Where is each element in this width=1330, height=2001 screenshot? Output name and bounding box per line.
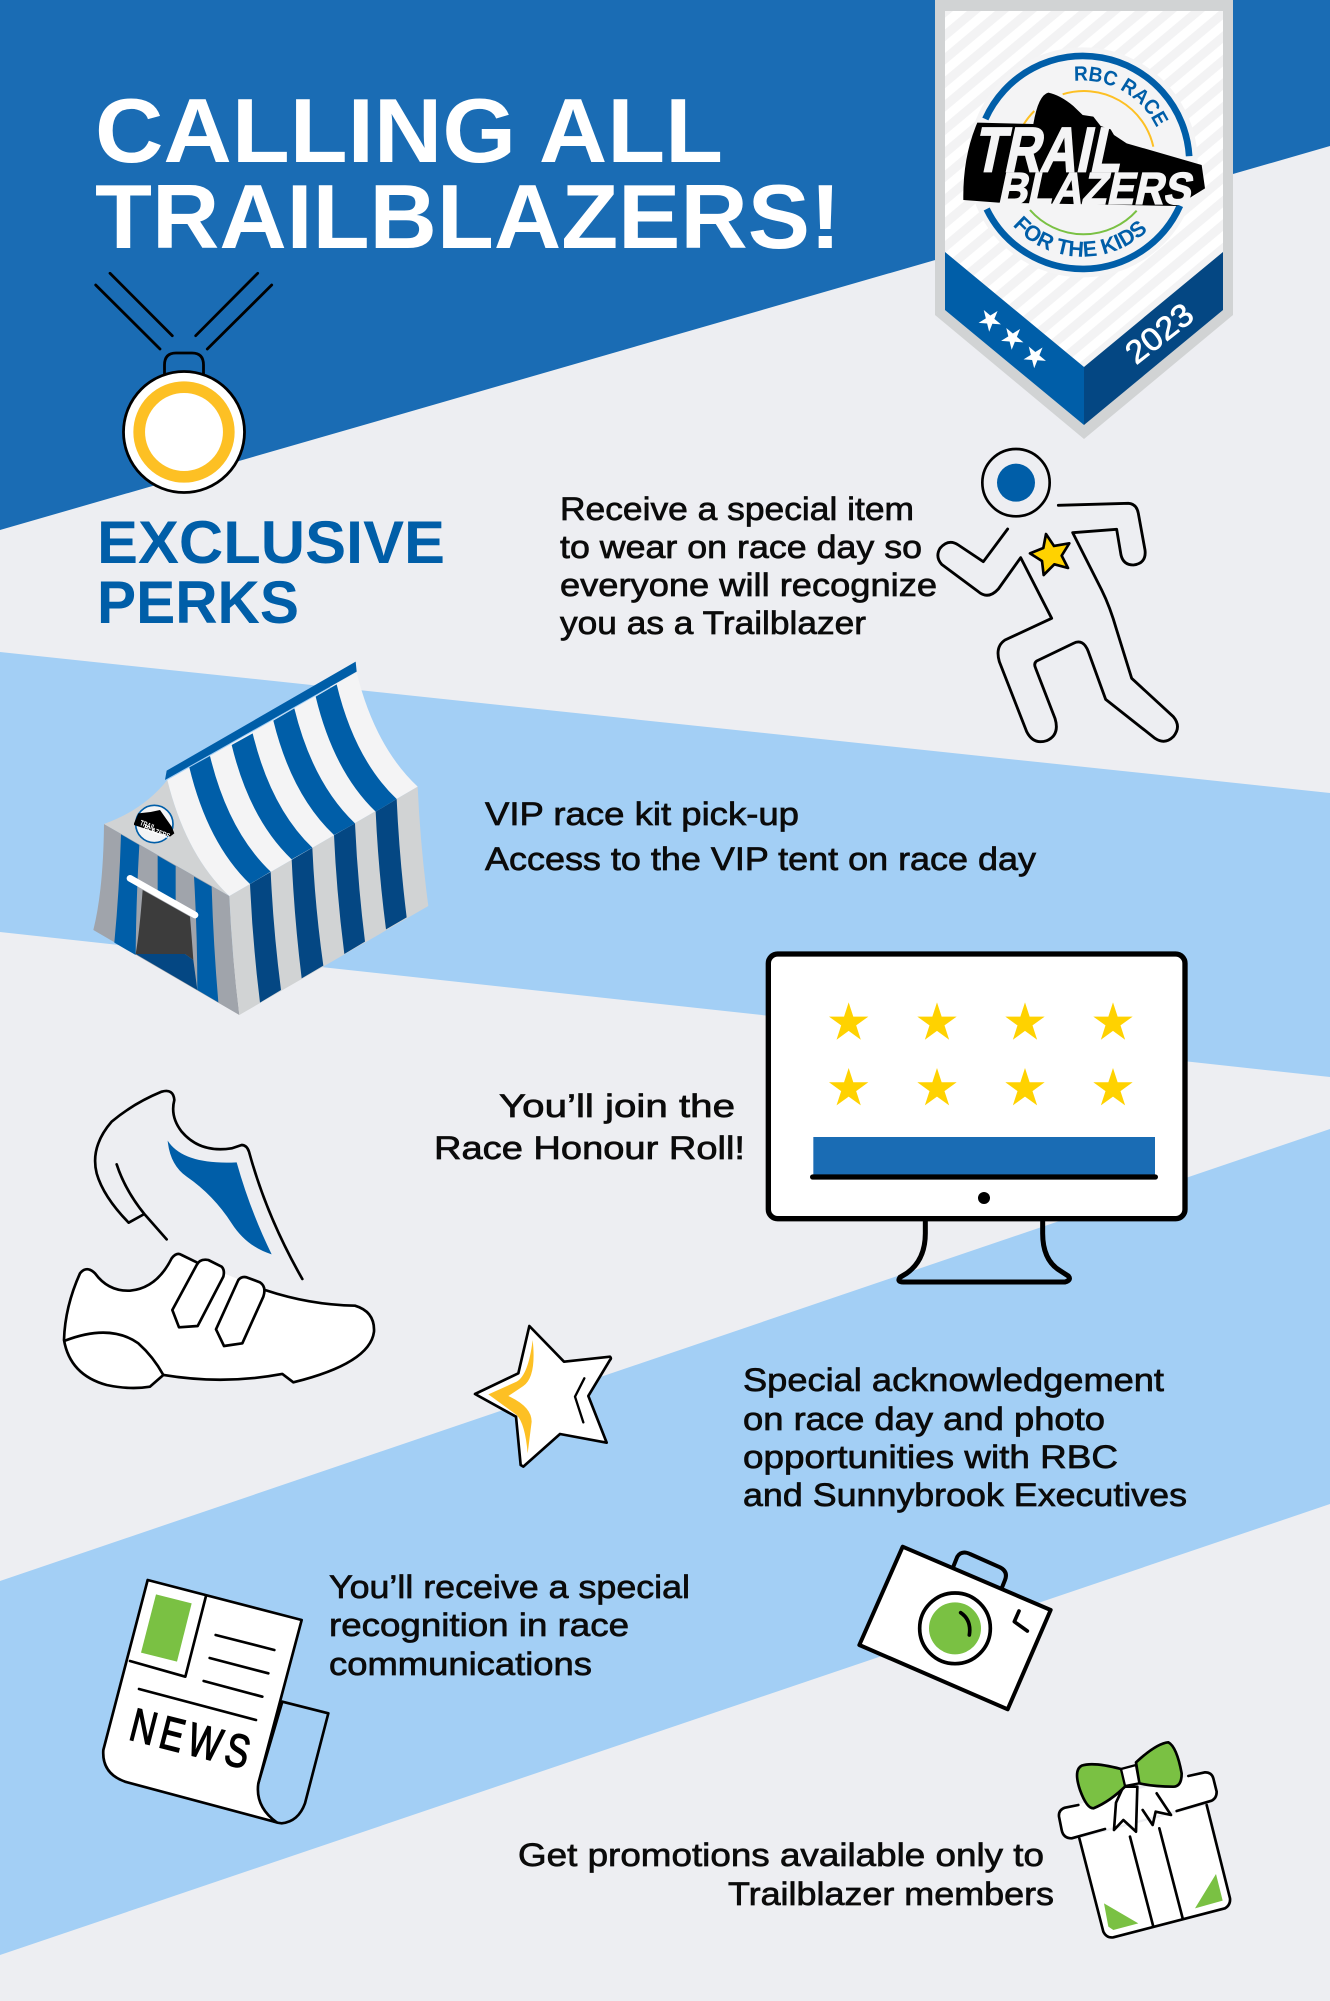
tent front wall xyxy=(93,824,239,1015)
icon: monitor with stars xyxy=(768,954,1185,1282)
race logo: BLAZERS xyxy=(995,163,1199,214)
icon: running shoe xyxy=(64,1091,374,1388)
text: acknowledgement: Special acknowledgement xyxy=(743,1362,1164,1398)
text: promotions xyxy=(518,1837,1054,1912)
text: special item: you as a Trailblazer xyxy=(560,605,866,641)
tent gable logo: BLAZERS xyxy=(143,823,171,841)
heading: exclusive perks: PERKS xyxy=(97,569,299,636)
badge: Trailblazers 2023 xyxy=(935,0,1233,439)
text: promotions: Get promotions available only to xyxy=(518,1837,1044,1873)
badge right ribbon xyxy=(1084,252,1223,425)
tent doorway xyxy=(136,890,193,960)
text: promotions: Trailblazer members xyxy=(728,1876,1054,1912)
badge stars xyxy=(975,304,1051,371)
tent ridge xyxy=(165,662,357,780)
text: VIP perks xyxy=(485,796,1036,877)
text: special item xyxy=(560,491,937,641)
text: honour roll: You’ll join the xyxy=(499,1088,735,1124)
text: recognition: recognition in race xyxy=(329,1607,629,1643)
badge year: 2023 xyxy=(1118,296,1200,371)
icon: VIP tent xyxy=(93,662,428,1015)
badge frame xyxy=(935,0,1233,439)
heading: exclusive perks: EXCLUSIVE xyxy=(97,509,445,576)
text: VIP perks: VIP race kit pick-up xyxy=(485,796,799,832)
text: acknowledgement: opportunities with RBC xyxy=(743,1439,1118,1475)
text: acknowledgement: on race day and photo xyxy=(743,1401,1105,1437)
star grid xyxy=(829,1002,1133,1105)
text: VIP perks: Access to the VIP tent on race day xyxy=(485,841,1036,877)
text: recognition: communications xyxy=(329,1646,592,1682)
race logo: TRAIL xyxy=(970,114,1132,186)
heading: exclusive perks xyxy=(97,509,445,636)
light blue band: lower xyxy=(0,1129,1330,1955)
dark blue header wedge xyxy=(0,0,1330,530)
race logo xyxy=(963,48,1205,277)
text: acknowledgement xyxy=(743,1362,1187,1513)
icon: newspaper: NEWS xyxy=(125,1698,256,1779)
text: honour roll: Race Honour Roll! xyxy=(434,1130,745,1166)
title: CALLING ALL xyxy=(95,81,723,182)
text: recognition: You’ll receive a special xyxy=(329,1569,690,1605)
icon: gift box xyxy=(1059,1742,1230,1937)
icon: sparkling star xyxy=(475,1326,611,1467)
light blue band: upper xyxy=(0,652,1330,1077)
tent right wall xyxy=(229,787,428,1015)
tent roof xyxy=(167,673,418,896)
title: TRAILBLAZERS! xyxy=(95,167,841,268)
tent gable logo: TRAIL xyxy=(139,818,157,832)
tent gable logo xyxy=(134,805,174,843)
icon: runner with star xyxy=(938,449,1177,742)
icon: medal xyxy=(96,273,272,492)
text: special item: Receive a special item xyxy=(560,491,914,527)
text: acknowledgement: and Sunnybrook Executives xyxy=(743,1477,1187,1513)
icon: camera xyxy=(859,1547,1051,1709)
badge striped panel xyxy=(945,11,1223,367)
text: special item: everyone will recognize xyxy=(560,567,937,603)
title xyxy=(95,81,841,268)
race logo: FOR THE KIDS xyxy=(1014,216,1146,257)
tent gable xyxy=(104,780,229,896)
text: recognition xyxy=(329,1569,690,1682)
race logo: RBC RACE xyxy=(1075,66,1169,127)
text: honour roll xyxy=(434,1088,745,1166)
icon: newspaper xyxy=(103,1580,328,1823)
badge left ribbon xyxy=(945,252,1084,425)
text: special item: to wear on race day so xyxy=(560,529,922,565)
